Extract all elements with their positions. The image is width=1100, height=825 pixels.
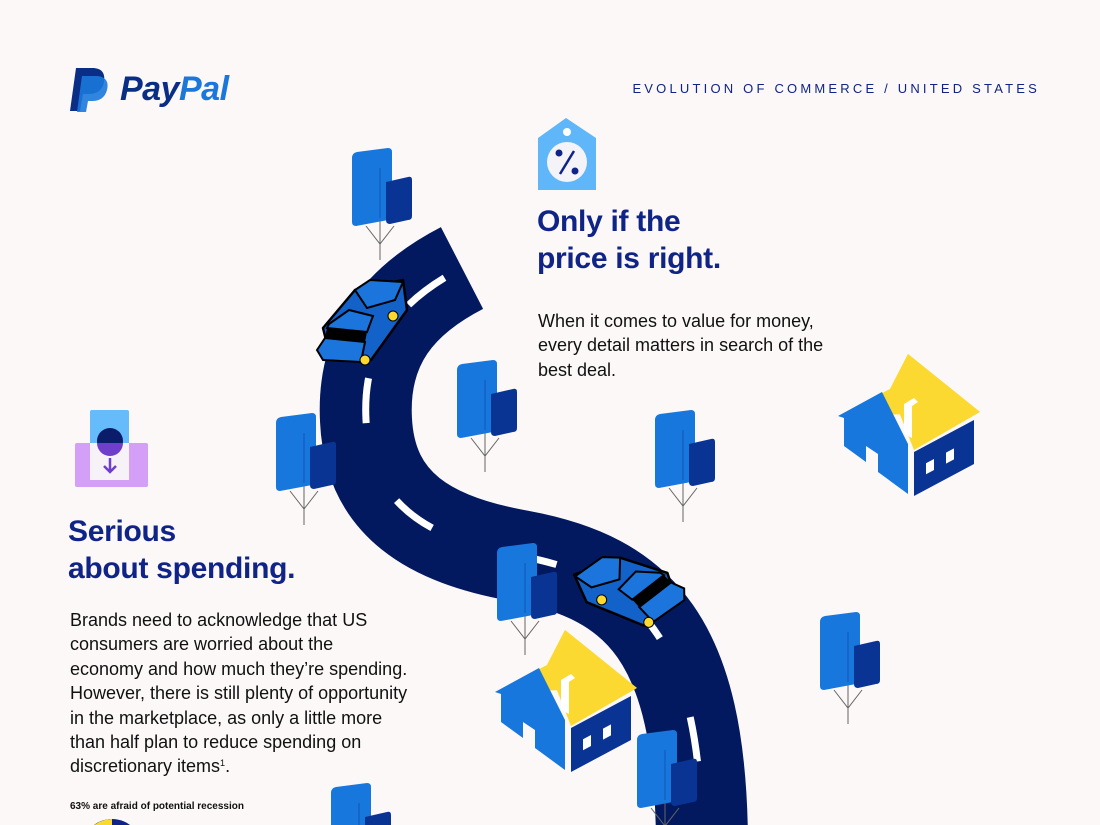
house bottom bbox=[495, 630, 637, 772]
car top bbox=[317, 280, 407, 365]
house right bbox=[838, 354, 980, 496]
header label: EVOLUTION OF COMMERCE / UNITED STATES bbox=[632, 81, 1040, 96]
text: price body bbox=[538, 311, 823, 380]
text: spending body: discretionary items1. bbox=[70, 756, 230, 776]
tree in front of road bbox=[497, 543, 557, 655]
text: spending body: economy and how much they’re spending. bbox=[70, 659, 407, 679]
icon: price tag bbox=[538, 118, 596, 190]
heading: price: Only if the bbox=[537, 205, 680, 238]
text: spending body bbox=[70, 610, 408, 776]
logo: PayPal: PayPal bbox=[120, 70, 229, 108]
text: price body: best deal. bbox=[538, 360, 616, 380]
heading: price: price is right. bbox=[537, 242, 721, 275]
icon: download bbox=[75, 410, 148, 487]
heading: spending bbox=[68, 515, 295, 585]
logo: PayPal bbox=[70, 68, 230, 112]
text: spending body: However, there is still plenty of opportunity bbox=[70, 683, 407, 703]
text: spending body: consumers are worried about the bbox=[70, 634, 333, 654]
heading: price bbox=[537, 205, 721, 275]
heading: spending: about spending. bbox=[68, 552, 295, 585]
text: spending body: Brands need to acknowledge that US bbox=[70, 610, 367, 630]
car middle bbox=[571, 529, 692, 649]
text: price body: When it comes to value for money, bbox=[538, 311, 814, 331]
road bbox=[366, 268, 702, 825]
trees bbox=[276, 148, 880, 825]
text: price body: every detail matters in search of the bbox=[538, 335, 823, 355]
text: spending body: than half plan to reduce spending on bbox=[70, 732, 361, 752]
pie chart bbox=[94, 819, 130, 825]
text: spending body: in the marketplace, as only a little more bbox=[70, 708, 382, 728]
stat label: 63% are afraid of potential recession bbox=[70, 801, 244, 812]
heading: spending: Serious bbox=[68, 515, 176, 548]
